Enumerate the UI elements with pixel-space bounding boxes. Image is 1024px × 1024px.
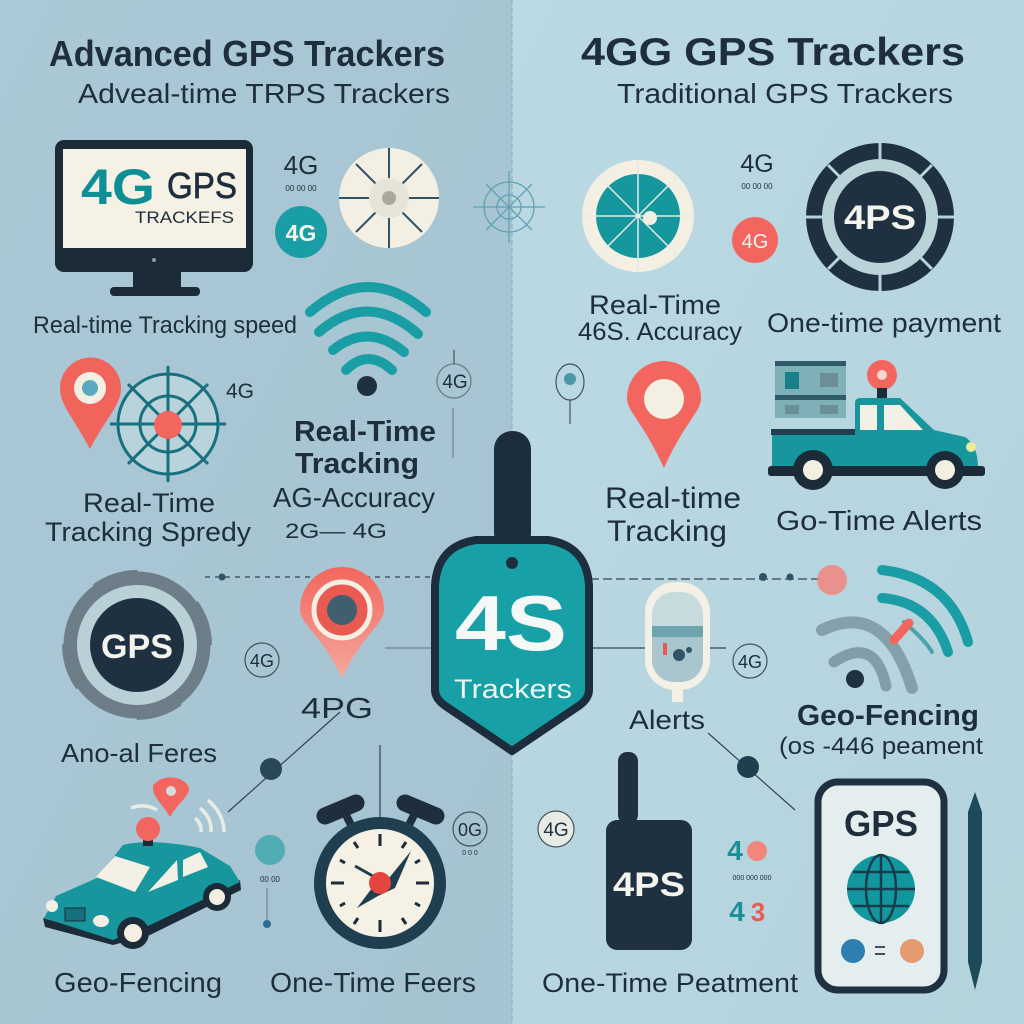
icon: monitor bbox=[55, 140, 253, 296]
icon: 4PS ring: 4PS bbox=[844, 199, 916, 237]
icon: 4PS ring bbox=[806, 143, 954, 291]
caption: geo-fencing: Geo-Fencing bbox=[54, 967, 222, 998]
icon: compass dial left bbox=[339, 148, 439, 248]
icon: crosshair between panels bbox=[473, 171, 545, 243]
icon: pin and radar: 4G bbox=[226, 380, 254, 403]
icon: truck bbox=[768, 360, 985, 490]
icon: small 4G badge: 4G bbox=[250, 651, 274, 671]
icon: stopwatch bbox=[320, 803, 440, 943]
icon: pin and radar bbox=[60, 358, 254, 482]
icon: monitor: 4G bbox=[81, 159, 155, 215]
icon: car bbox=[43, 777, 241, 949]
small 4G badge bbox=[437, 350, 471, 458]
icon: handheld tracker bbox=[606, 752, 692, 950]
connector dot bbox=[260, 758, 282, 780]
subtitle: left: Adveal-time TRPS Trackers bbox=[78, 78, 450, 109]
text block: real-time tracking accuracy: AG-Accuracy bbox=[273, 482, 435, 513]
icon: stylus bbox=[968, 792, 982, 990]
caption: real-time tracking speedy: Real-Time bbox=[83, 488, 215, 518]
text block: geo-fencing bbox=[779, 700, 983, 760]
panel: right background bbox=[512, 0, 1024, 1024]
icon: radar dial right bbox=[582, 160, 694, 272]
label: alerts: Alerts bbox=[629, 705, 705, 735]
connector dot right bbox=[737, 756, 759, 778]
caption: real-time tracking speedy bbox=[45, 488, 252, 547]
icon: 4G label and badge bbox=[275, 150, 327, 258]
text block: real-time tracking accuracy: Tracking bbox=[295, 448, 419, 480]
icon: alert device bbox=[645, 582, 710, 702]
small legend numbers: 3 bbox=[751, 897, 765, 927]
icon: small 4G badge bbox=[245, 643, 279, 677]
icon: GPS ring: GPS bbox=[101, 628, 173, 666]
small pin badge bbox=[556, 364, 584, 424]
icon: monitor: TRACKEFS bbox=[135, 208, 234, 227]
icon: red pin right bbox=[627, 361, 701, 468]
icon: small teal marker: 00 00 bbox=[260, 875, 281, 884]
icon: center tag tracker: 4S bbox=[455, 579, 567, 667]
title: right: 4GG GPS Trackers bbox=[581, 31, 965, 74]
small legend numbers: 000 000 000 bbox=[733, 875, 772, 882]
caption: one-time payment: One-time payment bbox=[767, 308, 1002, 338]
icon: 4G labels right: 00 00 00 bbox=[741, 182, 773, 191]
icon: 4G label and badge: 4G bbox=[284, 150, 318, 180]
small 0G badge: 0G bbox=[458, 820, 482, 840]
small legend numbers: 4 bbox=[729, 896, 745, 927]
small 4G badge lower: 4G bbox=[543, 820, 569, 841]
text block: geo-fencing: (os -446 peament bbox=[779, 733, 983, 760]
title: left: Advanced GPS Trackers bbox=[49, 33, 445, 74]
icon: smartphone: GPS bbox=[844, 803, 918, 844]
caption: one-time payment bottom: One-Time Peatment bbox=[542, 968, 799, 998]
caption: real-time accuracy bbox=[578, 290, 743, 346]
caption: annual fees: Ano-al Feres bbox=[61, 738, 217, 768]
caption: real-time tracking: Tracking bbox=[607, 515, 727, 548]
small 0G badge bbox=[453, 812, 487, 857]
caption: one-time fees: One-Time Feers bbox=[270, 967, 476, 998]
icon: 4G label and badge: 4G bbox=[286, 220, 316, 246]
icon: center tag tracker: Trackers bbox=[454, 674, 572, 704]
small 4G badge right bbox=[733, 644, 767, 678]
icon: GPS ring bbox=[62, 570, 212, 720]
icon: smartphone bbox=[818, 782, 944, 990]
label: 4PG: 4PG bbox=[301, 693, 373, 725]
icon: 4G label and badge: 00 00 00 bbox=[285, 184, 317, 193]
small legend numbers bbox=[727, 835, 772, 927]
icon: wifi bbox=[310, 287, 426, 396]
small 4G badge: 4G bbox=[442, 372, 468, 393]
icon: wifi fading bbox=[817, 565, 968, 688]
text block: real-time tracking accuracy: 2G— 4G bbox=[285, 520, 387, 543]
panel: left background bbox=[0, 0, 512, 1024]
icon: 4G labels right: 4G bbox=[740, 150, 774, 178]
icon: small teal marker bbox=[255, 835, 285, 928]
small 0G badge: 0 0 0 bbox=[462, 850, 478, 857]
icon: 4G labels right bbox=[732, 150, 778, 263]
text block: real-time tracking accuracy bbox=[273, 416, 436, 543]
caption: real-time tracking speedy: Tracking Spredy bbox=[45, 517, 252, 547]
small 4G badge right: 4G bbox=[738, 652, 762, 672]
caption: go-time alerts: Go-Time Alerts bbox=[776, 505, 982, 536]
caption: real-time tracking bbox=[605, 482, 741, 548]
icon: large pin bbox=[300, 567, 384, 678]
icon: center tag tracker bbox=[435, 431, 589, 751]
caption: real-time accuracy: Real-Time bbox=[589, 290, 721, 320]
icon: 4G labels right: 4G bbox=[742, 231, 768, 253]
small legend numbers: 4 bbox=[727, 835, 743, 866]
small 4G badge lower bbox=[538, 811, 574, 847]
text block: real-time tracking accuracy: Real-Time bbox=[294, 416, 436, 448]
caption: Real-time Tracking speed bbox=[33, 312, 297, 339]
subtitle: right: Traditional GPS Trackers bbox=[617, 78, 953, 109]
text block: geo-fencing: Geo-Fencing bbox=[797, 700, 979, 732]
caption: real-time accuracy: 46S. Accuracy bbox=[578, 318, 743, 346]
icon: monitor: GPS bbox=[167, 165, 237, 206]
caption: real-time tracking: Real-time bbox=[605, 482, 741, 515]
icon: handheld tracker: 4PS bbox=[613, 866, 685, 904]
